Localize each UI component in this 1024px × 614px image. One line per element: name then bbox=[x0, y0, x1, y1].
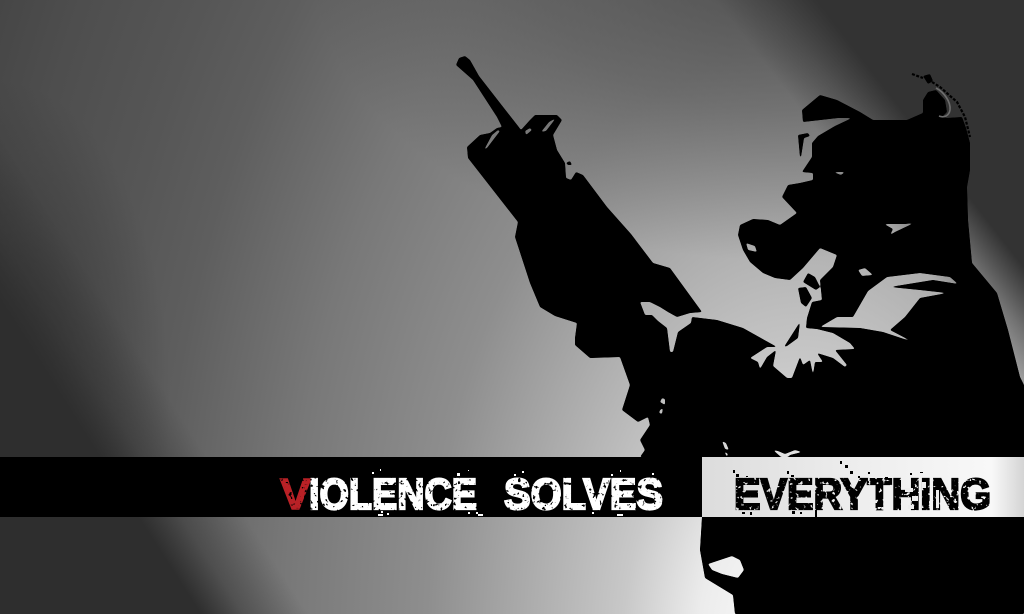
white band bbox=[702, 457, 1024, 517]
dark shadow wedge bottom left bbox=[0, 134, 308, 614]
slogan: violence solves bbox=[280, 469, 663, 519]
black band bbox=[0, 457, 702, 517]
dark shadow wedge top right bbox=[715, 0, 1024, 396]
word: iolence: IOLENCE bbox=[309, 470, 477, 519]
black neck strap pieces bbox=[784, 133, 820, 347]
slogan: everything: EVERYTHING bbox=[734, 470, 991, 519]
word: solves: SOLVES bbox=[504, 470, 663, 519]
paint splatter white bbox=[372, 469, 654, 516]
silhouette: soldier with rifle bbox=[456, 56, 1024, 614]
ink splatter dark bbox=[733, 461, 923, 517]
dark shade left edge bbox=[0, 80, 170, 614]
dark shade top bbox=[310, 0, 1024, 260]
helmet ring bbox=[936, 88, 950, 117]
paint wear white bbox=[905, 482, 939, 509]
letter V in red: V bbox=[280, 470, 312, 519]
dotted strap bbox=[912, 74, 970, 137]
helmet top blob bbox=[923, 74, 947, 117]
